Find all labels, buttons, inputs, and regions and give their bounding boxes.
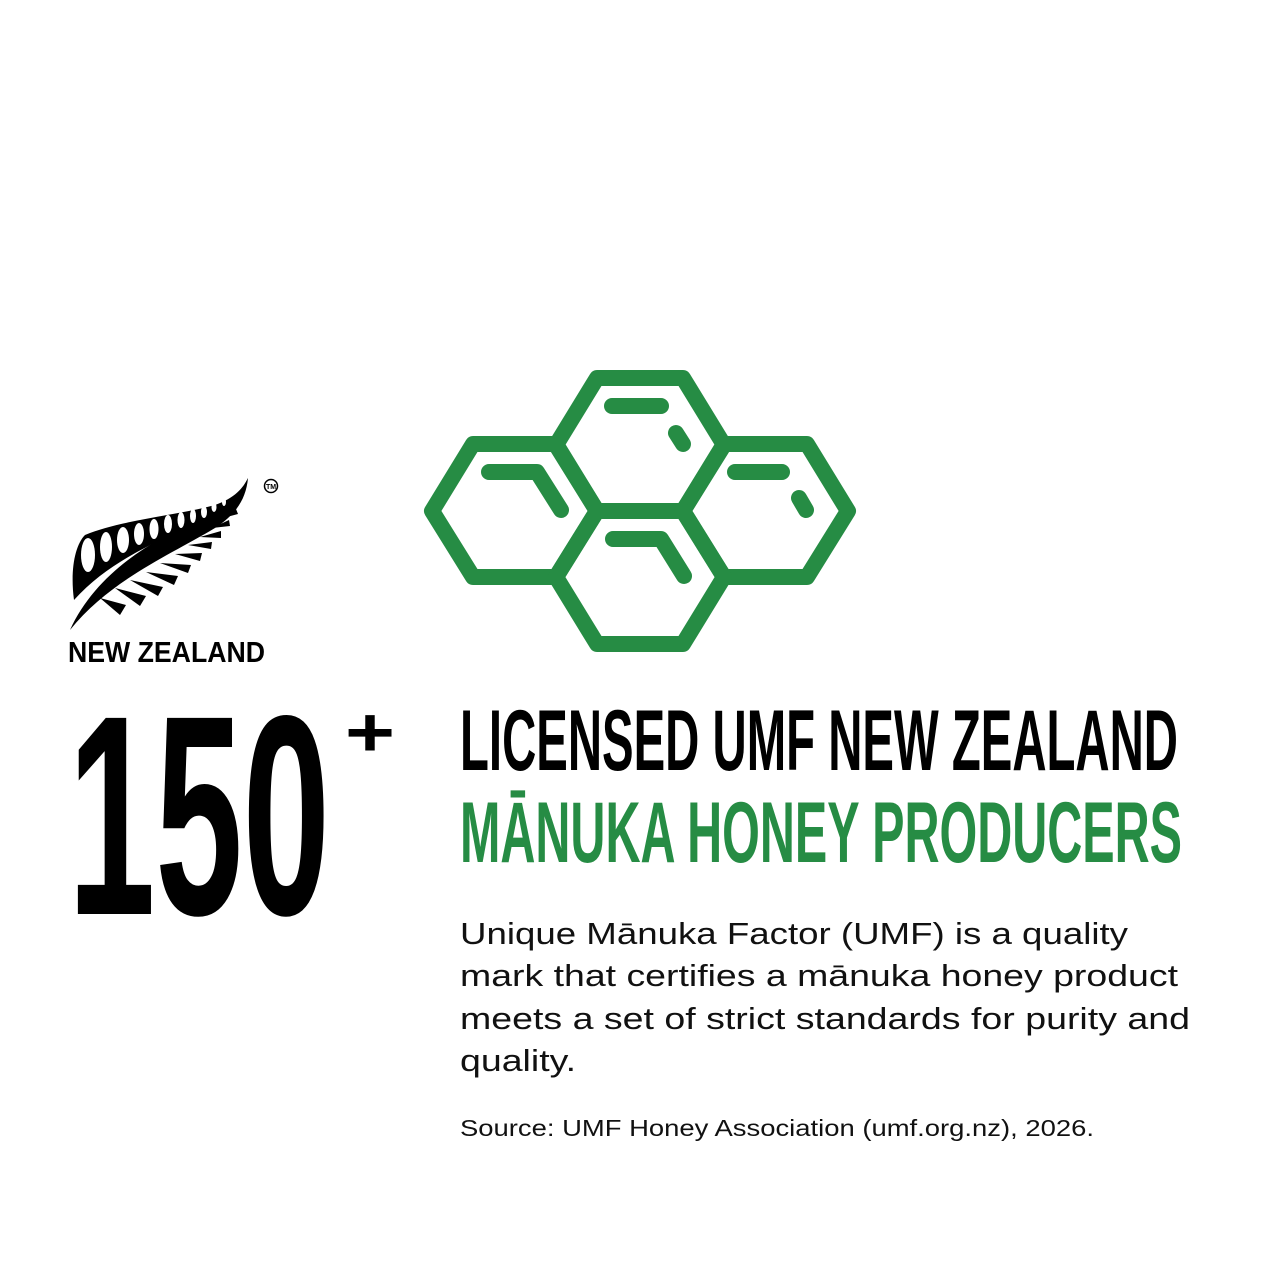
body text: mark that certifies a mānuka honey product <box>460 958 1178 993</box>
body text: meets a set of strict standards for purity and <box>460 1001 1190 1036</box>
body text <box>460 916 1190 1078</box>
icon: honeycomb <box>432 378 848 644</box>
source note: Source: UMF Honey Association (umf.org.nz), 2026. <box>460 1115 1094 1141</box>
plus sign: + <box>345 693 395 771</box>
body text: quality. <box>460 1043 576 1078</box>
heading <box>460 693 1182 881</box>
logo: new zealand fern <box>68 478 278 669</box>
big number: 150+ <box>68 657 395 975</box>
icon: fern <box>70 478 248 630</box>
big number: 150+: 150 <box>68 657 330 975</box>
trademark symbol: TM <box>266 484 276 491</box>
logo text: NEW ZEALAND <box>68 637 265 669</box>
body text: Unique Mānuka Factor (UMF) is a quality <box>460 916 1129 951</box>
trademark symbol <box>264 480 278 492</box>
